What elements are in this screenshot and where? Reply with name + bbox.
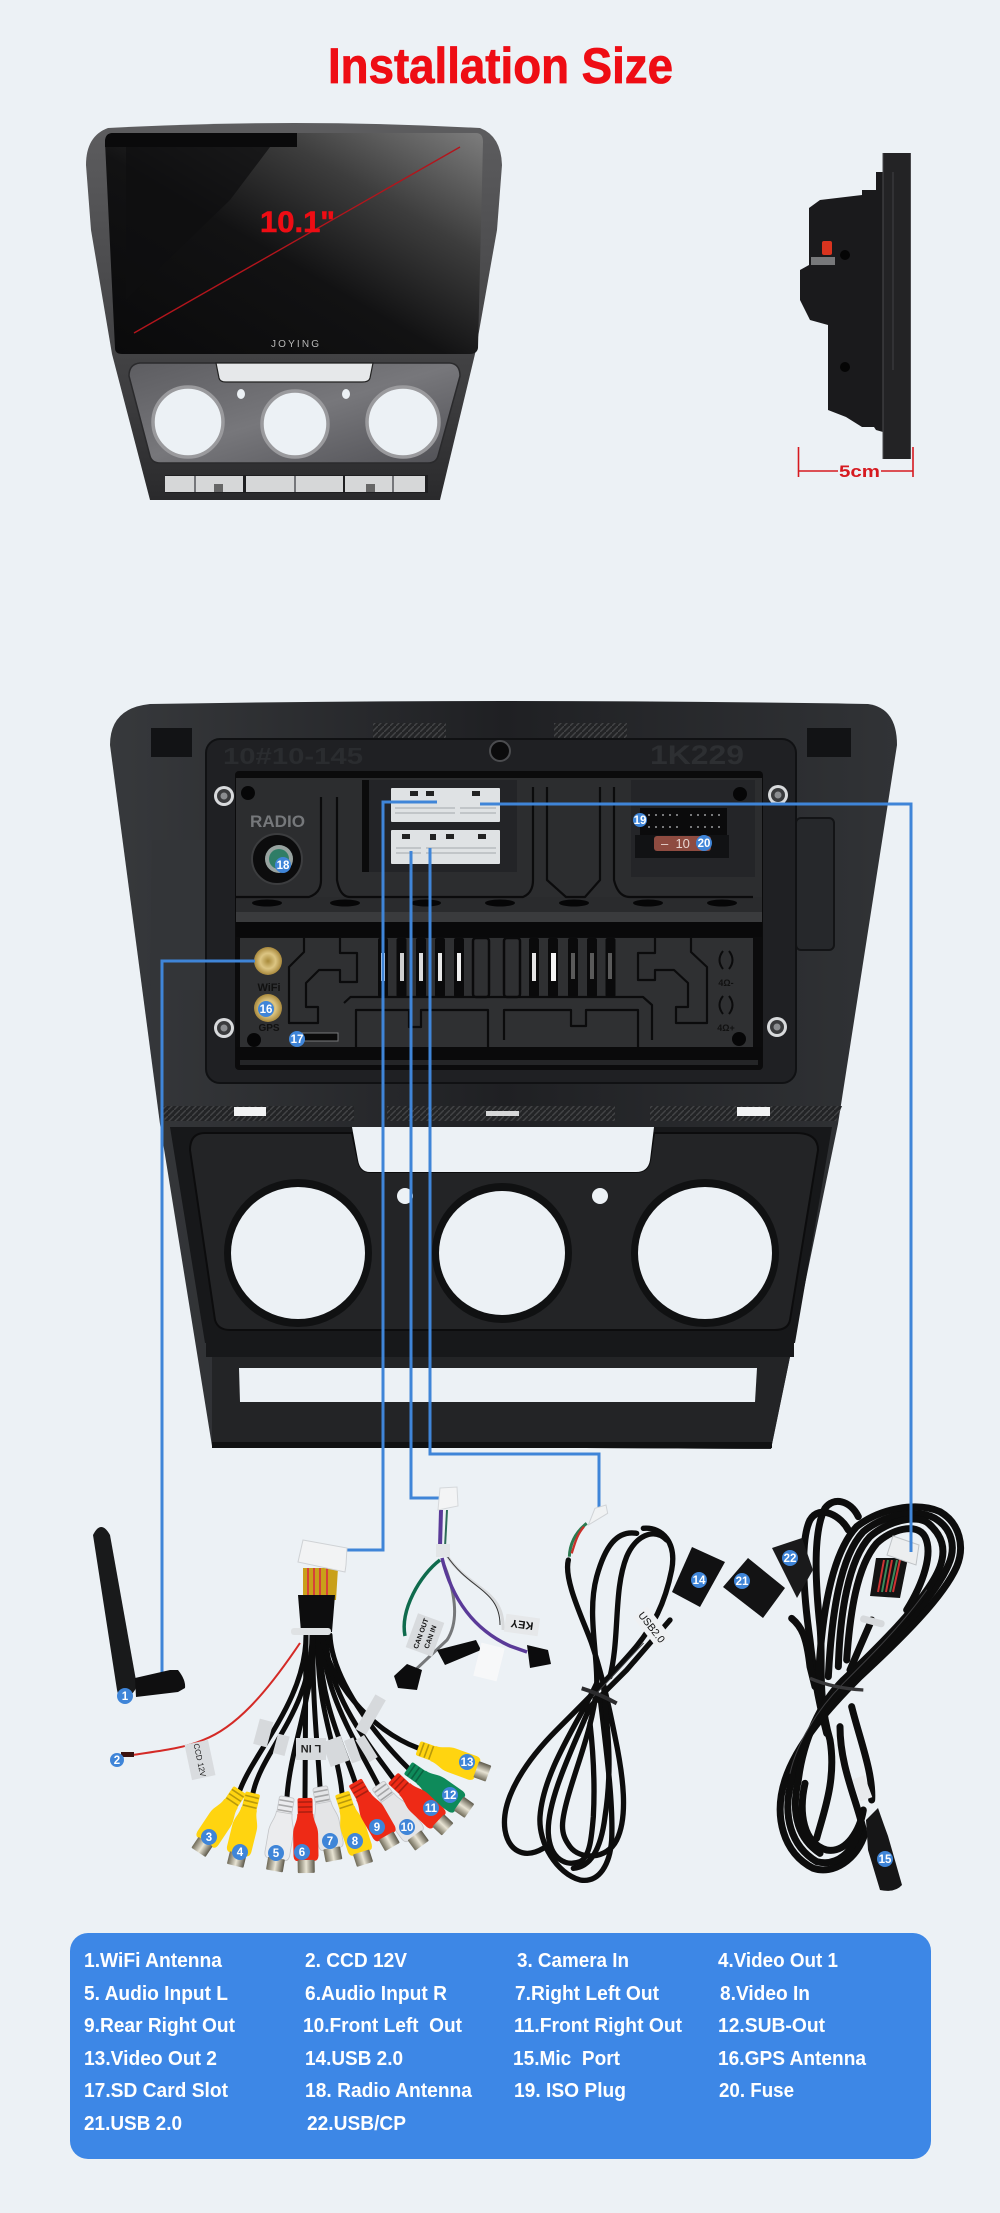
- fuse: – 10: [661, 836, 690, 851]
- legend panel: 20. Fuse: [719, 2080, 794, 2102]
- WiFi antenna socket: WiFi: [257, 982, 281, 994]
- key / CAN harness: [394, 1487, 551, 1690]
- head unit chassis: [235, 771, 763, 1070]
- SD card slot: [297, 1033, 338, 1041]
- plug 5: [262, 1795, 299, 1873]
- brand label: JOYING: [271, 339, 319, 350]
- legend panel: 21.USB 2.0: [84, 2113, 182, 2135]
- fan of black wires: [240, 1635, 418, 1798]
- tag label L IN: L IN: [301, 1742, 321, 1754]
- legend panel: 2. CCD 12V: [305, 1950, 408, 1972]
- USB and mic cable right: [780, 1501, 961, 1870]
- side tab: [796, 818, 834, 950]
- badge 17: 17: [291, 1034, 303, 1046]
- monitor bezel: [86, 123, 502, 500]
- RCA plugs: [188, 1736, 493, 1873]
- plug 11: [384, 1769, 456, 1838]
- badge 18: [275, 857, 291, 873]
- lower frame slot: [206, 1343, 794, 1449]
- KEY tag: KEY: [509, 1616, 534, 1632]
- top carbon tabs: [373, 723, 627, 746]
- radio antenna socket: [252, 834, 302, 884]
- RCA harness: [188, 1540, 493, 1873]
- fuse: [654, 836, 711, 851]
- speaker terminals: 4Ω-: [718, 978, 734, 988]
- plug 12: [401, 1758, 477, 1821]
- badge 5: [268, 1845, 284, 1861]
- CCD wire: [121, 1643, 300, 1780]
- mounting bracket: [206, 739, 796, 1083]
- badge 8: 8: [352, 1836, 359, 1848]
- badge 8: [347, 1833, 363, 1849]
- badge 18: 18: [277, 860, 290, 872]
- badge 9: 9: [374, 1822, 380, 1834]
- badge 6: [294, 1844, 310, 1860]
- legend panel: [70, 1933, 931, 2159]
- badge 21: [734, 1573, 750, 1589]
- plug 6: [293, 1798, 319, 1873]
- legend panel: 5. Audio Input L: [84, 1983, 228, 2005]
- USB/CP connector: [859, 1536, 919, 1628]
- legend panel: 22.USB/CP: [307, 2113, 406, 2135]
- legend panel: 16.GPS Antenna: [718, 2048, 867, 2070]
- plug 10: [368, 1778, 432, 1853]
- plug 4: [223, 1790, 265, 1869]
- badge 2: 2: [114, 1755, 120, 1767]
- badge 22: [782, 1550, 798, 1566]
- USB 2.0 tag: USB2.0: [635, 1610, 667, 1646]
- back frame of head unit: 1K229: [650, 740, 744, 770]
- radio label: RADIO: [250, 812, 305, 831]
- moulded marks: 10#10-145: [223, 743, 363, 769]
- legend panel: 17.SD Card Slot: [84, 2080, 228, 2102]
- badge 1: 1: [122, 1691, 129, 1703]
- wire tags: [253, 1694, 386, 1767]
- badge 14: [691, 1572, 707, 1588]
- speaker terminals: 4Ω+: [717, 1023, 735, 1033]
- climate panel: [129, 363, 460, 463]
- callout line WiFi: [162, 961, 255, 1677]
- badge 21: 21: [736, 1576, 749, 1588]
- badge 4: 4: [237, 1847, 244, 1859]
- mounting hole: [490, 741, 510, 761]
- moulded chassis outlines: [235, 787, 753, 1047]
- WiFi antenna: [93, 1527, 185, 1698]
- badge 15: 15: [879, 1854, 892, 1866]
- slots on divider bar: [252, 900, 737, 906]
- CAN tag: CAN IN: [424, 1625, 439, 1650]
- legend panel: 4.Video Out 1: [718, 1950, 838, 1972]
- mic jack: [866, 1808, 902, 1891]
- CAN tag: [406, 1613, 444, 1657]
- badge 13: 13: [461, 1757, 473, 1769]
- USB plug 14: [672, 1547, 725, 1607]
- callout line camera harness: [330, 802, 437, 1550]
- plug 8: [330, 1789, 377, 1868]
- number badges: [110, 813, 893, 1867]
- badge 2: [110, 1753, 124, 1767]
- touch screen: [105, 133, 483, 354]
- badge 10: 10: [401, 1822, 413, 1834]
- USB cable left: [504, 1505, 673, 1880]
- vent slots: [378, 938, 616, 997]
- badge 3: 3: [206, 1832, 212, 1844]
- badge 7: 7: [327, 1836, 333, 1848]
- badge 11: 11: [425, 1803, 438, 1815]
- legend panel: 8.Video In: [720, 1983, 810, 2005]
- badge 11: [423, 1800, 439, 1816]
- outer frame: [110, 701, 897, 1449]
- legend panel: 15.Mic Port: [513, 2048, 620, 2070]
- badge 9: [369, 1819, 385, 1835]
- size label 10.1 inch: 10.1": [260, 206, 335, 239]
- callout line key harness: [411, 851, 449, 1498]
- white connectors: [362, 780, 517, 872]
- badge 10: [399, 1819, 415, 1835]
- USB plug 21: [723, 1558, 785, 1618]
- badge 19: 19: [634, 815, 646, 827]
- legend panel: 13.Video Out 2: [84, 2048, 217, 2070]
- CCD tag: CCD 12V: [192, 1743, 208, 1778]
- badge 20: 20: [698, 838, 710, 850]
- badge 17: [289, 1031, 305, 1047]
- callout line USB 21/22: [480, 804, 911, 1552]
- plug 7: [308, 1785, 346, 1863]
- GPS antenna socket: GPS: [258, 1023, 280, 1034]
- screws: [214, 785, 788, 1047]
- legend panel: 12.SUB-Out: [718, 2015, 825, 2037]
- plug 13: [414, 1736, 493, 1785]
- badge 16: 16: [260, 1004, 272, 1016]
- badge 1: [117, 1688, 133, 1704]
- climate panel back: [170, 1127, 832, 1343]
- badge 3: [201, 1829, 217, 1845]
- button strip: [165, 475, 428, 493]
- KEY tag: [504, 1614, 540, 1636]
- plug 9: [344, 1776, 403, 1853]
- badge 13: [459, 1754, 475, 1770]
- legend panel: 6.Audio Input R: [305, 1983, 448, 2005]
- head unit front view: [86, 123, 502, 500]
- legend panel: 7.Right Left Out: [515, 1983, 659, 2005]
- speaker terminals: [717, 951, 735, 1033]
- callout line USB 14: [430, 848, 599, 1507]
- CCD tag: [185, 1740, 215, 1780]
- badge 14: 14: [693, 1575, 706, 1587]
- white tag: [473, 1643, 505, 1681]
- dimension 5cm: 5cm: [839, 462, 880, 481]
- badge 12: 12: [444, 1790, 456, 1802]
- badge 20: [696, 835, 712, 851]
- badge 22: 22: [784, 1553, 796, 1565]
- legend panel: 3. Camera In: [517, 1950, 629, 1972]
- ISO plug: [631, 780, 755, 877]
- CAN tag: CAN OUT: [413, 1617, 431, 1650]
- legend panel: 9.Rear Right Out: [84, 2015, 235, 2037]
- legend panel: 1.WiFi Antenna: [84, 1950, 223, 1972]
- WiFi antenna socket: [254, 947, 282, 994]
- badge 7: [322, 1833, 338, 1849]
- legend panel: 11.Front Right Out: [514, 2015, 682, 2037]
- legend panel: 14.USB 2.0: [305, 2048, 403, 2070]
- USB plug 22: [772, 1538, 813, 1598]
- badge 15: [877, 1851, 893, 1867]
- GPS antenna socket: [254, 994, 282, 1034]
- plug 3: [188, 1783, 250, 1859]
- harness connector: [291, 1540, 347, 1635]
- title: Installation Size: [328, 38, 673, 94]
- badge 16: [258, 1001, 274, 1017]
- carbon strip: [162, 1106, 842, 1121]
- badge 5: 5: [273, 1848, 280, 1860]
- side view of head unit: [800, 153, 911, 459]
- corner clips: [151, 728, 851, 757]
- black plugs: [394, 1640, 551, 1690]
- legend panel: 10.Front Left Out: [303, 2015, 462, 2037]
- badge 12: [442, 1787, 458, 1803]
- back frame of head unit: [110, 701, 897, 1449]
- badge 6: 6: [299, 1847, 305, 1859]
- badge 4: [232, 1844, 248, 1860]
- dimension 5cm: [798, 447, 913, 481]
- small connector: [438, 1487, 458, 1510]
- legend panel: 19. ISO Plug: [514, 2080, 626, 2102]
- legend panel: 18. Radio Antenna: [305, 2080, 473, 2102]
